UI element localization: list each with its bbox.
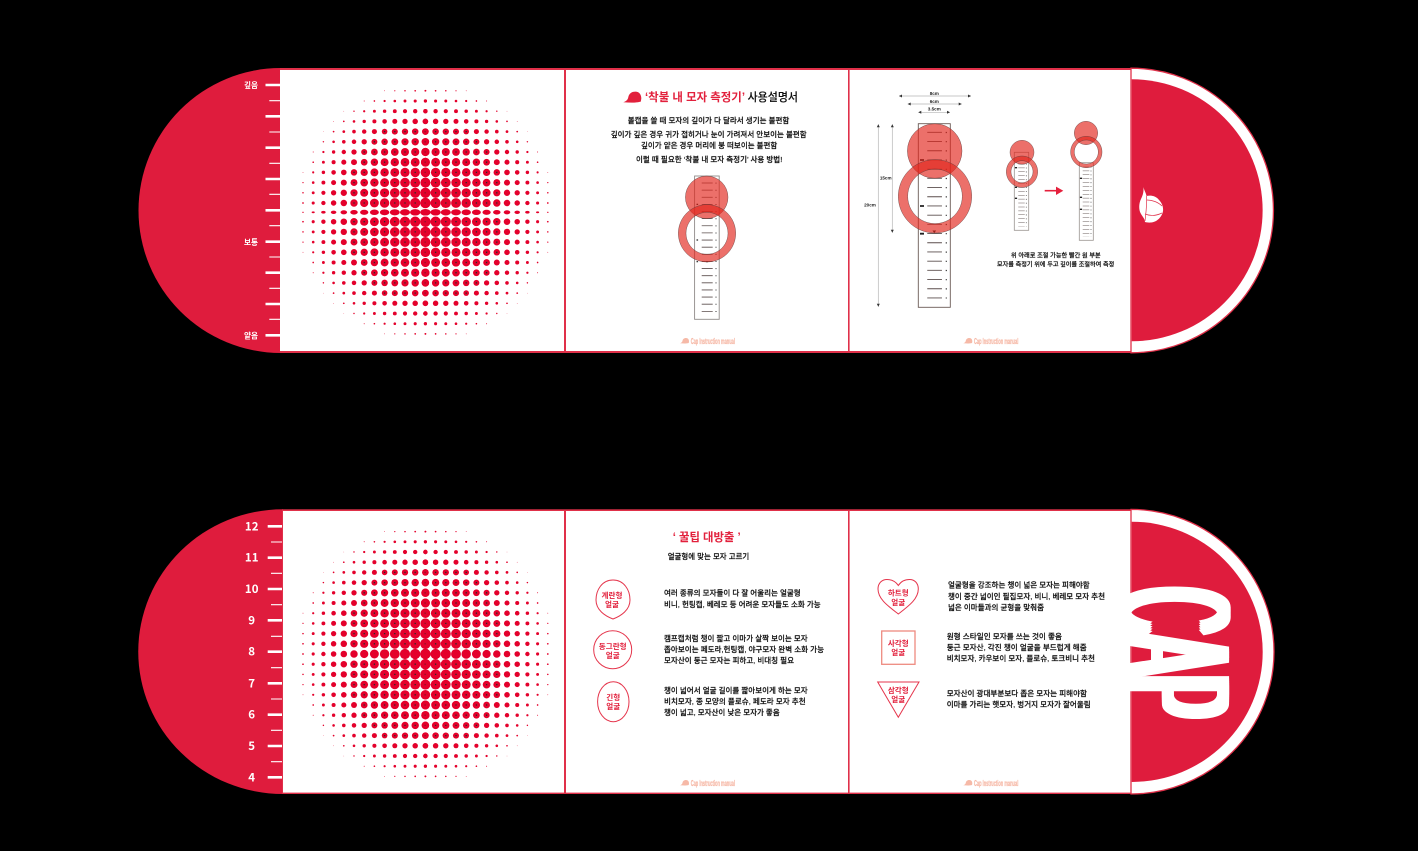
dimension arrows: 15cm <box>880 175 892 180</box>
left ruler cap: number scale: 6 <box>248 707 255 723</box>
item: triangle face: 삼각형 <box>888 685 909 695</box>
bottom band: tips <box>138 509 1274 794</box>
item: heart face: 얼굴형을 강조하는 챙이 넓은 모자는 피해야함 <box>948 580 1090 590</box>
item: round face: 좁아보이는 페도라,헌팅캡, 야구모자 완벽 소화 가능 <box>664 644 824 654</box>
intro text: 깊이가 깊은 경우 귀가 접히거나 눈이 가려져서 안보이는 불편함 <box>611 129 807 139</box>
item: long face: 얼굴 <box>606 701 620 711</box>
panel: tips continued: Cap Instruction manual <box>974 779 1018 788</box>
measuring tool diagram <box>678 176 736 319</box>
item: square face: 사각형 <box>888 638 909 648</box>
item: round face: 동그란형 <box>599 641 627 651</box>
right cap with hat icon <box>1131 68 1273 353</box>
left ruler cap: depth scale: 깊음 <box>244 80 259 90</box>
item: egg face <box>596 580 821 619</box>
left ruler cap: number scale: 12 <box>245 518 259 534</box>
item: triangle face: 이마를 가리는 햇모자, 벙거지 모자가 잘어울림 <box>947 699 1091 709</box>
panel: dimensions and adjustment <box>864 91 1114 346</box>
dimension arrows: 3.5cm <box>928 106 941 111</box>
large measuring tool <box>898 124 972 307</box>
item: long face: 긴형 <box>606 692 620 702</box>
left ruler cap: number scale: 9 <box>248 612 255 628</box>
left ruler cap: number scale <box>138 509 283 794</box>
item: heart face: 하트형 <box>888 588 909 598</box>
title: 사용설명서 <box>748 91 798 104</box>
panel frame <box>282 509 1132 794</box>
left ruler cap: number scale: 10 <box>245 581 259 597</box>
item: long face: 챙이 넓고, 모자산이 낮은 모자가 좋음 <box>664 707 780 717</box>
intro text: 볼캡을 쓸 때 모자의 깊이가 다 달라서 생기는 불편함 <box>628 115 789 125</box>
item: round face: 모자산이 둥근 모자는 피하고, 비대칭 필요 <box>664 655 794 665</box>
dimension arrows <box>864 91 971 307</box>
item: triangle face: 얼굴 <box>891 694 905 704</box>
title: ‘착불 내 모자 측정기’ <box>645 90 745 104</box>
item: square face: 둥근 모자산, 각진 챙이 얼굴을 부드럽게 해줌 <box>947 642 1087 652</box>
item: egg face: 여러 종류의 모자들이 다 잘 어울리는 얼굴형 <box>664 588 801 598</box>
panel frame <box>280 68 1132 353</box>
dimension arrows: 6cm <box>930 99 939 104</box>
footer label <box>963 337 1018 346</box>
item: triangle face: 모자산이 광대부분보다 좁은 모자는 피해야함 <box>947 688 1087 698</box>
item: heart face: 넓은 이마들과의 균형을 맞춰줌 <box>948 602 1044 612</box>
small tool: before <box>1006 140 1038 230</box>
heading: ‘ 꿀팁 대방출 ’ <box>673 530 741 544</box>
panel: tips continued <box>878 580 1105 788</box>
item: egg face: 계란형 <box>602 590 622 600</box>
item: egg face: 얼굴 <box>605 599 619 609</box>
item: long face: 비치모자, 종 모양의 플로슈, 페도라 모자 추천 <box>664 696 806 706</box>
panel: tips by face shape: Cap Instruction manual <box>691 779 735 788</box>
left ruler cap: depth scale: 얕음 <box>244 330 259 340</box>
panel: manual intro: Cap Instruction manual <box>691 337 735 346</box>
heading: 얼굴형에 맞는 모자 고르기 <box>668 551 749 561</box>
CAP wordmark: CAP <box>1085 588 1264 718</box>
left ruler cap: depth scale <box>139 68 281 353</box>
item: egg face: 비니, 헌팅캡, 베레모 등 어려운 모자들도 소화 가능 <box>664 599 821 609</box>
dimension arrows: 20cm <box>864 203 876 208</box>
halftone dot circle <box>302 90 549 335</box>
item: round face <box>594 631 824 669</box>
small tool: after <box>1071 121 1102 240</box>
footer label <box>680 337 735 346</box>
intro text <box>611 115 807 164</box>
panel: manual intro <box>611 90 807 346</box>
intro text: 이럴 때 필요한 ‘착불 내 모자 측정기’ 사용 방법! <box>636 154 782 164</box>
left ruler cap: depth scale: 보통 <box>244 238 258 247</box>
item: heart face: 챙이 중간 넓이인 필집모자, 비니, 베레모 모자 추천 <box>948 591 1105 601</box>
footer label <box>963 779 1018 788</box>
item: round face: 캠프캡처럼 챙이 짧고 이마가 살짝 보이는 모자 <box>664 633 808 643</box>
item: round face: 얼굴 <box>606 650 620 660</box>
left ruler cap: number scale: 5 <box>248 738 255 754</box>
adjustment caption <box>997 252 1114 269</box>
left ruler cap: number scale: 7 <box>248 675 255 691</box>
item: heart face: 얼굴 <box>891 597 905 607</box>
left ruler cap: number scale: 4 <box>248 769 255 785</box>
dimension arrows: 8cm <box>930 91 939 96</box>
item: square face <box>882 631 1095 664</box>
adjustment caption: 위 아래로 조절 가능한 빨간 원 부분 <box>1011 252 1101 260</box>
arrow <box>1045 187 1063 195</box>
right cap with CAP lettering <box>1085 509 1274 794</box>
item: square face: 원형 스타일인 모자를 쓰는 것이 좋음 <box>947 631 1062 641</box>
top band: usage manual <box>139 68 1273 353</box>
icon: hat <box>1139 187 1163 223</box>
item: long face <box>598 682 808 722</box>
footer label <box>680 779 735 788</box>
item: heart face <box>878 580 1105 614</box>
left ruler cap: number scale: 11 <box>245 550 259 566</box>
panel: tips by face shape <box>594 530 824 788</box>
panel: dimensions and adjustment: Cap Instruction manual <box>974 337 1018 346</box>
item: long face: 챙이 넓어서 얼굴 길이를 짧아보이게 하는 모자 <box>664 685 808 695</box>
item: square face: 얼굴 <box>891 647 905 657</box>
left ruler cap: number scale: 8 <box>248 644 255 660</box>
item: triangle face <box>878 682 1091 717</box>
item: square face: 비치모자, 카우보이 모자, 플로슈, 토크비니 추천 <box>947 653 1095 663</box>
heading <box>668 530 749 561</box>
halftone dot circle <box>302 531 549 777</box>
intro text: 깊이가 얕은 경우 머리에 붕 떠보이는 불편함 <box>641 140 777 150</box>
adjustment caption: 모자를 측정기 위에 두고 깊이를 조절하여 측정 <box>997 261 1114 269</box>
title <box>623 90 798 104</box>
